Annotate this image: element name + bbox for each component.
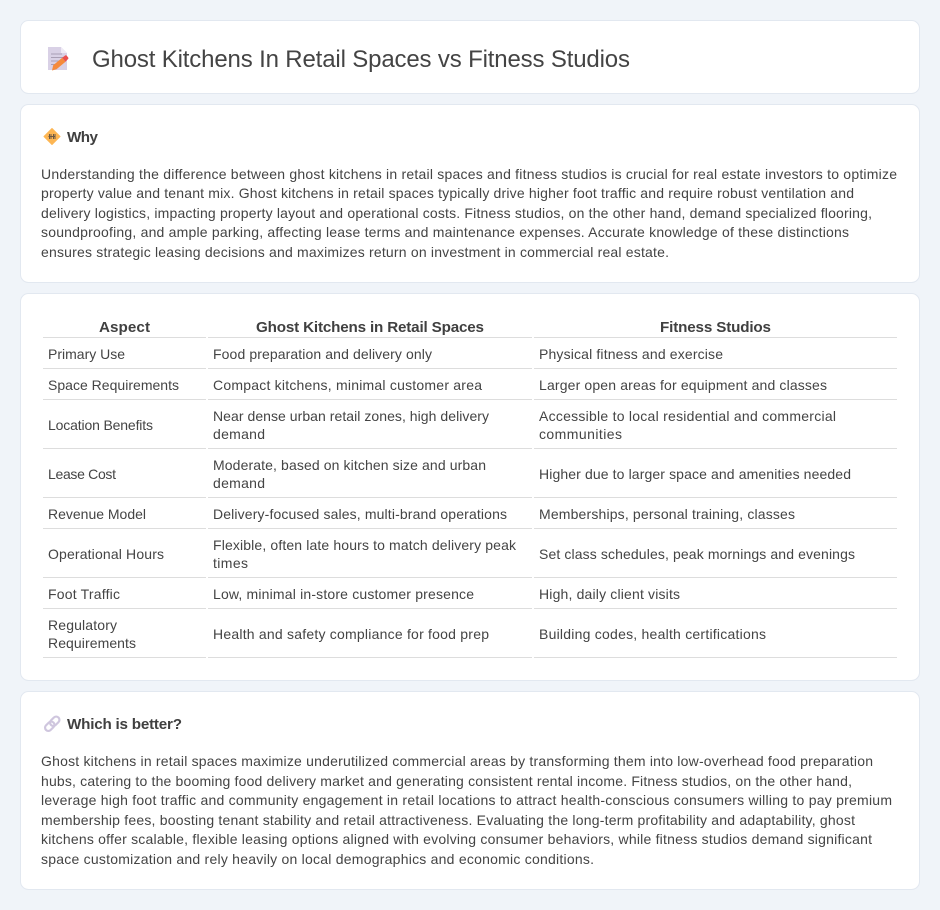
row: location benefits: Location Benefits xyxy=(48,417,153,433)
row: primary use: Physical fitness and exercise xyxy=(539,346,723,362)
panel: comparison table xyxy=(20,294,920,680)
heading: why: Why xyxy=(67,129,99,146)
title: Ghost Kitchens In Retail Spaces vs Fitness Studios xyxy=(92,46,630,73)
row: revenue model: Delivery-focused sales, multi-brand operations xyxy=(213,506,507,522)
panel: which is better xyxy=(20,692,920,890)
text block: why paragraph: Understanding the difference between ghost kitchens in retail spaces and fitness studios is crucial for real estate investors to optimize xyxy=(41,166,897,182)
text block: why paragraph: delivery logistics, impacting property layout and operational costs. Fitness studios, on the other hand, demand specialized flooring, xyxy=(41,205,872,221)
row: primary use: Primary Use xyxy=(48,346,125,362)
row: lease cost xyxy=(43,457,897,498)
row: primary use xyxy=(43,346,897,368)
row: regulatory requirements: Regulatory xyxy=(48,617,117,633)
row: location benefits: demand xyxy=(213,426,265,442)
row: operational hours: Set class schedules, peak mornings and evenings xyxy=(539,546,855,562)
row: revenue model xyxy=(43,506,897,528)
row: operational hours: Operational Hours xyxy=(48,546,164,562)
row: location benefits: Near dense urban retail zones, high delivery xyxy=(213,408,489,424)
row: location benefits: Accessible to local residential and commercial xyxy=(539,408,836,424)
text block: why paragraph: soundproofing, and ample parking, affecting lease terms and maintenance expenses. Accurate knowledge of these distinctions xyxy=(41,224,849,240)
row: operational hours xyxy=(43,537,897,578)
row: foot traffic: Low, minimal in-store customer presence xyxy=(213,586,474,602)
table header row: Fitness Studios xyxy=(660,319,771,336)
row: regulatory requirements xyxy=(43,617,897,658)
row: space requirements: Larger open areas for equipment and classes xyxy=(539,377,827,393)
row: lease cost: demand xyxy=(213,475,265,491)
row: space requirements xyxy=(43,377,897,400)
text block: why paragraph xyxy=(41,166,897,260)
heading: which is better: Which is better? xyxy=(67,716,182,733)
row: lease cost: Moderate, based on kitchen size and urban xyxy=(213,457,486,473)
row: operational hours: Flexible, often late hours to match delivery peak xyxy=(213,537,517,553)
row: lease cost: Lease Cost xyxy=(48,466,116,482)
text block: which is better paragraph: space customization and rely heavily on local demographics and economic conditions. xyxy=(41,851,594,867)
row: foot traffic: High, daily client visits xyxy=(539,586,680,602)
row: foot traffic xyxy=(43,586,897,608)
text block: why paragraph: ensures strategic leasing decisions and maximizes return on investment in commercial real estate. xyxy=(41,244,669,260)
row: revenue model: Revenue Model xyxy=(48,506,146,522)
row: regulatory requirements: Health and safety compliance for food prep xyxy=(213,626,489,642)
row: primary use: Food preparation and delivery only xyxy=(213,346,432,362)
panel: header xyxy=(20,20,920,94)
row: operational hours: times xyxy=(213,555,248,571)
text block: which is better paragraph: hubs, catering to the booming food delivery market and generating consistent rental income. Fitness studios, on the other hand, xyxy=(41,773,852,789)
text block: which is better paragraph: leverage high foot traffic and community engagement in retail locations to attract health-conscious consumers willing to pay premium xyxy=(41,792,892,808)
row: revenue model: Memberships, personal training, classes xyxy=(539,506,795,522)
row: regulatory requirements: Requirements xyxy=(48,635,136,651)
table header row: Ghost Kitchens in Retail Spaces xyxy=(256,319,484,336)
table header row: Aspect xyxy=(99,319,150,336)
row: space requirements: Space Requirements xyxy=(48,377,179,393)
row: space requirements: Compact kitchens, minimal customer area xyxy=(213,377,482,393)
row: lease cost: Higher due to larger space and amenities needed xyxy=(539,466,851,482)
icon: link xyxy=(44,715,61,732)
text block: which is better paragraph: kitchens offer scalable, flexible leasing options aligned with evolving consumer behaviors, while fitness studios demand significant xyxy=(41,831,872,847)
row: location benefits: communities xyxy=(539,426,622,442)
text block: which is better paragraph: Ghost kitchens in retail spaces maximize underutilized commercial areas by transforming them into low-overhead food preparation xyxy=(41,753,873,769)
icon: warning diamond xyxy=(44,128,60,144)
text block: which is better paragraph: membership fees, boosting tenant stability and retail attractiveness. Evaluating the long-term profitability and adaptability, ghost xyxy=(41,812,855,828)
text block: which is better paragraph xyxy=(41,753,892,867)
panel: why xyxy=(20,104,920,282)
icon: document with pencil xyxy=(48,47,68,70)
text block: why paragraph: property value and tenant mix. Ghost kitchens in retail spaces typically drive higher foot traffic and require robust ventilation and xyxy=(41,185,854,201)
table header row xyxy=(43,319,897,338)
row: location benefits xyxy=(43,408,897,448)
row: foot traffic: Foot Traffic xyxy=(48,586,120,602)
row: regulatory requirements: Building codes, health certifications xyxy=(539,626,766,642)
